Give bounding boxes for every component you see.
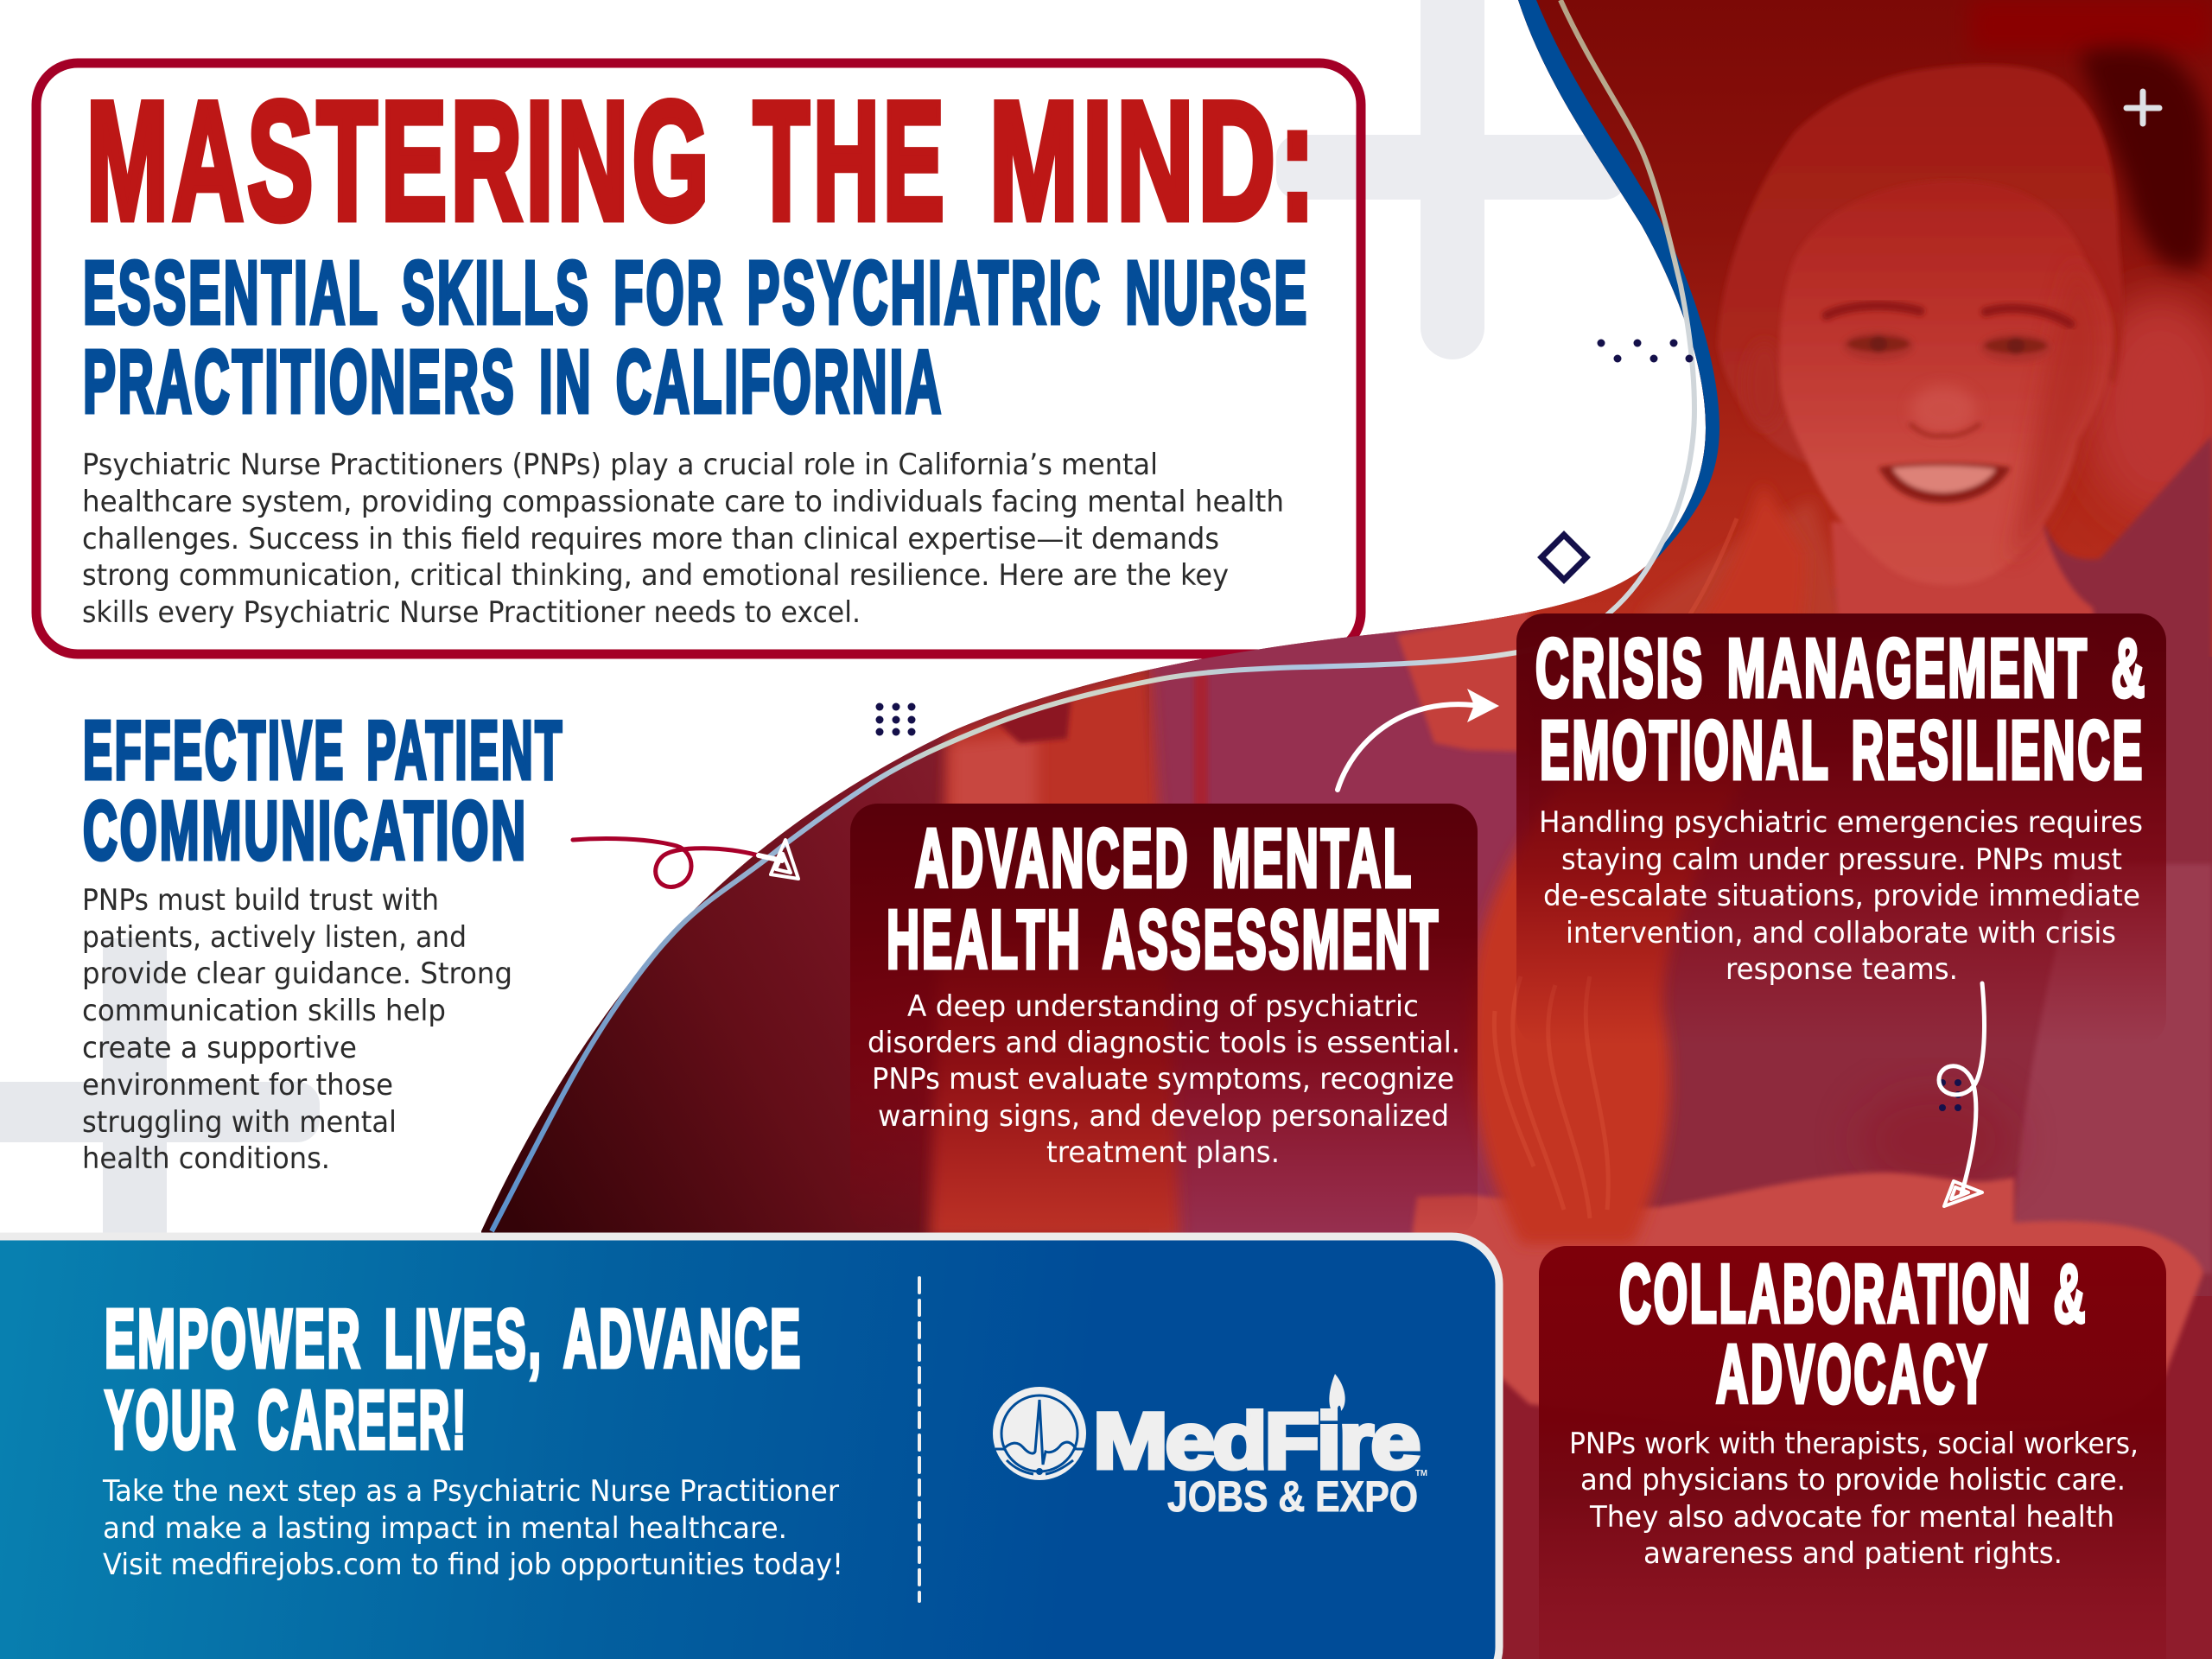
- bright wedge by the crisis box: [1397, 609, 1529, 752]
- arm band: [1413, 1173, 2203, 1433]
- body: struggling with mental: [82, 1105, 397, 1140]
- body: PNPs must evaluate symptoms, recognize: [872, 1062, 1454, 1096]
- body: health conditions.: [82, 1141, 330, 1176]
- subtitle: [83, 243, 1309, 431]
- body: patients, actively listen, and: [82, 920, 467, 955]
- trademark: TM: [1415, 1469, 1427, 1478]
- intro paragraph: skills every Psychiatric Nurse Practitioner needs to excel.: [82, 595, 861, 630]
- title: THE: [753, 67, 948, 255]
- heading: YOUR CAREER!: [105, 1374, 468, 1466]
- heading: [1619, 1248, 2088, 1421]
- wall behind the nurse: [1469, 0, 2212, 657]
- scrubs sleeve: [2014, 864, 2212, 1274]
- blue ribbon: [1518, 0, 1719, 577]
- heading: ADVOCACY: [1716, 1328, 1989, 1421]
- red figure column: [929, 665, 1180, 1240]
- logo wordmark: MedFire: [1093, 1397, 1419, 1485]
- brows: [1827, 306, 2070, 324]
- subtitle: PRACTITIONERS IN CALIFORNIA: [83, 332, 944, 431]
- thin flowing line: [492, 0, 1694, 1231]
- icon: diamond: [1541, 535, 1586, 580]
- narrow stripe: [1194, 674, 1208, 830]
- scrubs shoulders: [2043, 436, 2212, 657]
- logo tagline: JOBS & EXPO: [1167, 1472, 1418, 1521]
- left ear: [1745, 341, 1783, 428]
- body: [1569, 1427, 2139, 1571]
- heading: ADVANCED MENTAL: [915, 812, 1414, 905]
- arrow: white curved: [1338, 689, 1499, 790]
- body: create a supportive: [82, 1031, 357, 1065]
- heading: COMMUNICATION: [83, 785, 528, 877]
- icon: flame: [1329, 1374, 1345, 1417]
- decorative plus lower left: [0, 938, 320, 1236]
- panel: effective patient communication: [82, 704, 564, 1176]
- body: PNPs work with therapists, social workers,: [1569, 1427, 2139, 1461]
- heading: [887, 812, 1440, 986]
- neck: [1831, 522, 2100, 657]
- intro paragraph: Psychiatric Nurse Practitioners (PNPs) play a crucial role in California’s mental: [82, 448, 1158, 482]
- body: [868, 989, 1460, 1170]
- hair fall behind neck: [1647, 503, 1839, 613]
- face right shading: [2009, 259, 2104, 563]
- body: [1539, 805, 2143, 987]
- arrow: white loop: [1939, 983, 1984, 1206]
- heading: [1535, 622, 2147, 797]
- panel: title box: [36, 63, 1361, 654]
- body: [102, 1474, 843, 1582]
- icon: plus: [2126, 92, 2159, 124]
- eyes: [1842, 330, 2052, 363]
- mauve background stripe: [1149, 626, 1529, 1240]
- heading: HEALTH ASSESSMENT: [887, 893, 1440, 986]
- body: PNPs must build trust with: [82, 883, 439, 918]
- intro paragraph: [82, 448, 1284, 630]
- body: response teams.: [1726, 952, 1958, 987]
- dark shape top right: [2078, 48, 2210, 270]
- left dark sweep: [481, 658, 1203, 1232]
- heading: [105, 1293, 803, 1466]
- title: MASTERING: [86, 67, 713, 255]
- decorative plus top: [1276, 0, 1627, 359]
- ponytail: [1471, 484, 1806, 1244]
- panel: call to action: [0, 1236, 1499, 1659]
- icon: logo badge: [993, 1387, 1086, 1480]
- intro paragraph: challenges. Success in this field requires more than clinical expertise—it demands: [82, 522, 1219, 556]
- body: Handling psychiatric emergencies requires: [1539, 805, 2143, 840]
- body: de-escalate situations, provide immediate: [1543, 879, 2140, 913]
- title: MIND:: [989, 67, 1319, 255]
- body: warning signs, and develop personalized: [878, 1099, 1449, 1134]
- head hair: [1718, 65, 2123, 462]
- bright background right of the head: [2082, 294, 2212, 518]
- dots top: [1597, 339, 1694, 363]
- top right band: [1974, 2, 2209, 47]
- heading: EMPOWER LIVES, ADVANCE: [105, 1293, 803, 1385]
- mouth: [1878, 463, 2011, 503]
- pink column highlight: [944, 734, 1039, 804]
- divider: [918, 1278, 921, 1601]
- body: and physicians to provide holistic care.: [1580, 1463, 2126, 1497]
- scrubs pocket shadow: [1873, 1099, 1998, 1177]
- hair strands: [1494, 518, 1737, 1218]
- panel: crisis management: [1516, 613, 2166, 1046]
- body: treatment plans.: [1046, 1135, 1280, 1170]
- intro paragraph: strong communication, critical thinking, and emotional resilience. Here are the key: [82, 558, 1229, 593]
- body: awareness and patient rights.: [1643, 1536, 2063, 1571]
- dark patch: [996, 696, 1071, 743]
- panel: collaboration and advocacy: [1539, 1246, 2166, 1659]
- body: environment for those: [82, 1068, 393, 1103]
- lower scrubs: [1503, 1296, 2212, 1659]
- body: intervention, and collaborate with crisis: [1566, 916, 2116, 950]
- body: They also advocate for mental health: [1589, 1500, 2114, 1535]
- nose: [1910, 385, 1980, 436]
- dots on pocket: [1939, 1079, 1961, 1111]
- body: communication skills help: [82, 994, 446, 1028]
- heading: [83, 704, 564, 877]
- body: Visit medfirejobs.com to find job opportunities today!: [103, 1548, 843, 1582]
- logo: MedFire Jobs and Expo: [993, 1374, 1427, 1521]
- heading: EFFECTIVE PATIENT: [83, 704, 564, 797]
- body: Take the next step as a Psychiatric Nurse Practitioner: [102, 1474, 839, 1509]
- arrow: red loop: [573, 838, 798, 887]
- body: provide clear guidance. Strong: [82, 957, 512, 991]
- body: A deep understanding of psychiatric: [907, 989, 1419, 1024]
- body: disorders and diagnostic tools is essential.: [868, 1026, 1460, 1060]
- body: staying calm under pressure. PNPs must: [1561, 842, 2122, 877]
- body: and make a lasting impact in mental healthcare.: [103, 1511, 787, 1546]
- intro paragraph: healthcare system, providing compassionate care to individuals facing mental health: [82, 485, 1284, 519]
- dots grid: [876, 703, 916, 736]
- panel: advanced mental health assessment: [850, 804, 1478, 1236]
- face: [1779, 181, 2113, 585]
- body: [82, 883, 512, 1176]
